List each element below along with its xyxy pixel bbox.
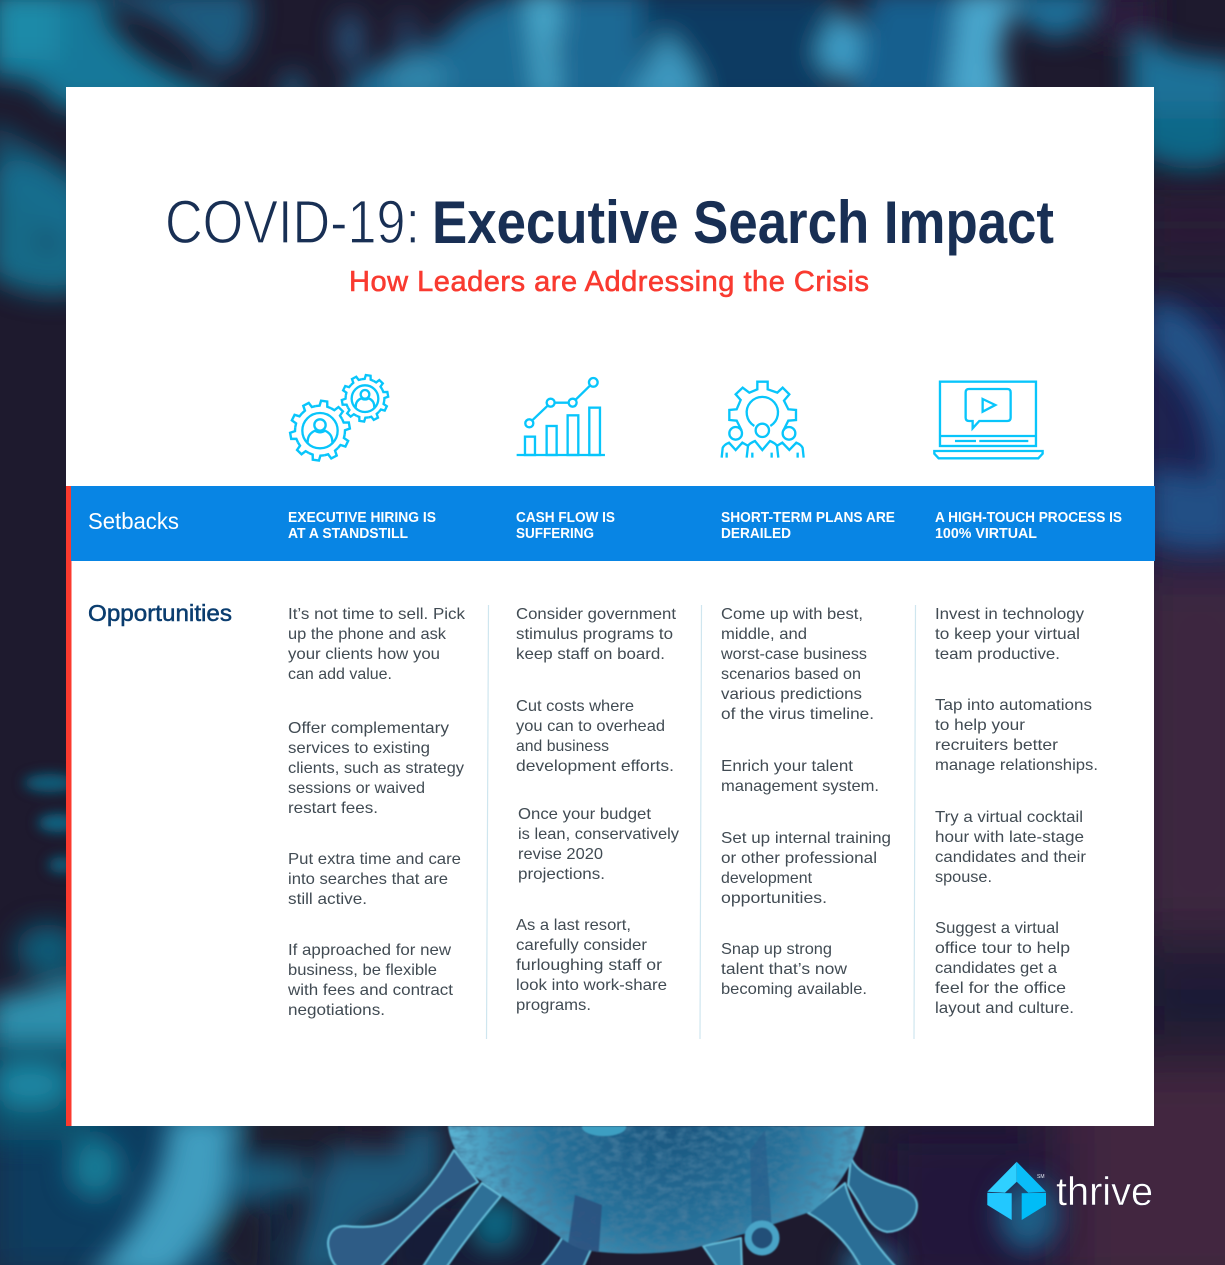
opportunities column 3: Snap up strong xyxy=(721,941,832,958)
top band xyxy=(0,0,220,110)
thrive logo xyxy=(987,1162,1153,1220)
lower left xyxy=(0,975,90,1060)
opportunities column 3: opportunities. xyxy=(721,890,827,907)
opportunities column 1: restart fees. xyxy=(288,800,378,817)
opportunities column 3: becoming available. xyxy=(721,981,867,998)
opportunities column 2: look into work-share xyxy=(516,977,667,994)
virus ball spike xyxy=(748,1224,776,1252)
background: sharp virus at bottom centre xyxy=(328,1118,917,1265)
title: Executive Search Impact xyxy=(432,189,1054,256)
opportunities column 4: to keep your virtual xyxy=(935,626,1080,643)
opportunities column 4: candidates get a xyxy=(935,960,1057,977)
setback 2: CASH FLOW IS xyxy=(516,510,615,526)
opportunities label: Opportunities xyxy=(88,600,232,626)
opportunities column 3: Set up internal training xyxy=(721,830,891,847)
opportunities column 4: layout and culture. xyxy=(935,1000,1074,1017)
opportunities column 3: talent that’s now xyxy=(721,961,847,978)
opportunities column 1: sessions or waived xyxy=(288,780,425,797)
opportunities column 3 xyxy=(720,606,891,998)
white panel xyxy=(66,87,1154,1126)
virus body xyxy=(448,1126,865,1254)
opportunities column 4: Tap into automations xyxy=(935,697,1092,714)
opportunities column 3: worst-case business xyxy=(720,646,867,663)
opportunities column 3: development xyxy=(721,870,813,887)
opportunities column 4: office tour to help xyxy=(935,940,1070,957)
setback 1: AT A STANDSTILL xyxy=(288,526,408,542)
opportunities column 4: team productive. xyxy=(935,646,1060,663)
opportunities column 3: Enrich your talent xyxy=(721,758,854,775)
opportunities column 3: Come up with best, xyxy=(721,606,863,623)
opportunities column 2: development efforts. xyxy=(516,758,674,775)
icon: growth chart xyxy=(517,378,605,455)
opportunities column 3: various predictions xyxy=(721,686,862,703)
setbacks label: Setbacks xyxy=(88,508,179,534)
thrive logo: SM xyxy=(1037,1174,1044,1180)
virus surface texture xyxy=(448,1126,856,1253)
subtitle: How Leaders are Addressing the Crisis xyxy=(349,266,869,298)
setback 4 xyxy=(935,510,1122,542)
opportunities column 2: programs. xyxy=(516,997,591,1014)
virus spikes xyxy=(328,1150,917,1265)
opportunities column 4: to help your xyxy=(935,717,1026,734)
opportunities column 1: negotiations. xyxy=(288,1002,385,1019)
opportunities column 3: management system. xyxy=(721,778,879,795)
opportunities column 2: Cut costs where xyxy=(516,698,634,715)
setback 1 xyxy=(288,510,436,542)
opportunities column 2 xyxy=(516,606,679,1014)
icon: laptop with video xyxy=(934,382,1043,458)
opportunities column 2: Once your budget xyxy=(518,806,652,823)
setback 1: EXECUTIVE HIRING IS xyxy=(288,510,436,526)
opportunities column 1: can add value. xyxy=(288,666,392,683)
setback 2 xyxy=(516,510,615,542)
small blobs along the left xyxy=(24,774,78,873)
setback 4: 100% VIRTUAL xyxy=(935,526,1037,542)
opportunities column 1: It’s not time to sell. Pick xyxy=(288,606,466,623)
opportunities column 1: still active. xyxy=(288,891,367,908)
opportunities column 1 xyxy=(287,606,466,1019)
opportunities column 3: scenarios based on xyxy=(721,666,861,683)
opportunities column 1: Put extra time and care xyxy=(288,851,461,868)
opportunities column 1: services to existing xyxy=(288,740,430,757)
left side xyxy=(0,158,90,295)
opportunities column 1: with fees and contract xyxy=(287,982,454,999)
opportunities column 1: business, be flexible xyxy=(288,962,437,979)
right side xyxy=(1135,87,1225,169)
opportunities column 2: stimulus programs to xyxy=(516,626,673,643)
opportunities column 4: feel for the office xyxy=(935,980,1066,997)
opportunities column 2: As a last resort, xyxy=(516,917,631,934)
setback 3: SHORT-TERM PLANS ARE xyxy=(721,510,895,526)
opportunities column 2: and business xyxy=(516,738,609,755)
opportunities column 2: carefully consider xyxy=(516,937,648,954)
opportunities column 2: you can to overhead xyxy=(516,718,665,735)
opportunities column 2: Consider government xyxy=(516,606,677,623)
opportunities column 3: middle, and xyxy=(721,626,807,643)
setbacks band xyxy=(71,486,1155,561)
opportunities column 4: recruiters better xyxy=(935,737,1059,754)
icon: gears with people xyxy=(285,372,392,464)
setback 2: SUFFERING xyxy=(516,526,594,542)
opportunities column 4 xyxy=(935,606,1098,1017)
opportunities column 2: furloughing staff or xyxy=(516,957,663,974)
setback 4: A HIGH-TOUCH PROCESS IS xyxy=(935,510,1122,526)
setback 3 xyxy=(721,510,895,542)
red side bar xyxy=(66,486,72,1126)
bottom band xyxy=(69,1138,121,1198)
title xyxy=(165,188,1054,256)
opportunities column 1: clients, such as strategy xyxy=(288,760,464,777)
opportunities column 4: candidates and their xyxy=(935,849,1087,866)
opportunities column 4: manage relationships. xyxy=(935,757,1098,774)
opportunities column 2: projections. xyxy=(518,866,605,883)
opportunities column 2: revise 2020 xyxy=(518,846,603,863)
opportunities column 1: If approached for new xyxy=(288,942,451,959)
icon: team and gear xyxy=(722,382,804,458)
opportunities column 1: into searches that are xyxy=(288,871,448,888)
opportunities column 4: Try a virtual cocktail xyxy=(935,809,1083,826)
opportunities column 3: or other professional xyxy=(721,850,877,867)
setback 3: DERAILED xyxy=(721,526,791,542)
title: COVID-19: xyxy=(165,188,420,256)
opportunities column 2: keep staff on board. xyxy=(516,646,665,663)
opportunities column 4: spouse. xyxy=(935,869,992,886)
thrive logo: thrive xyxy=(1056,1170,1153,1214)
opportunities column 2: is lean, conservatively xyxy=(518,826,679,843)
opportunities column 4: hour with late-stage xyxy=(935,829,1084,846)
opportunities column 4: Suggest a virtual xyxy=(935,920,1059,937)
opportunities column 1: up the phone and ask xyxy=(288,626,447,643)
opportunities column 4: Invest in technology xyxy=(935,606,1084,623)
opportunities column 1: your clients how you xyxy=(288,646,440,663)
opportunities column 3: of the virus timeline. xyxy=(721,706,874,723)
opportunities column 1: Offer complementary xyxy=(288,720,449,737)
